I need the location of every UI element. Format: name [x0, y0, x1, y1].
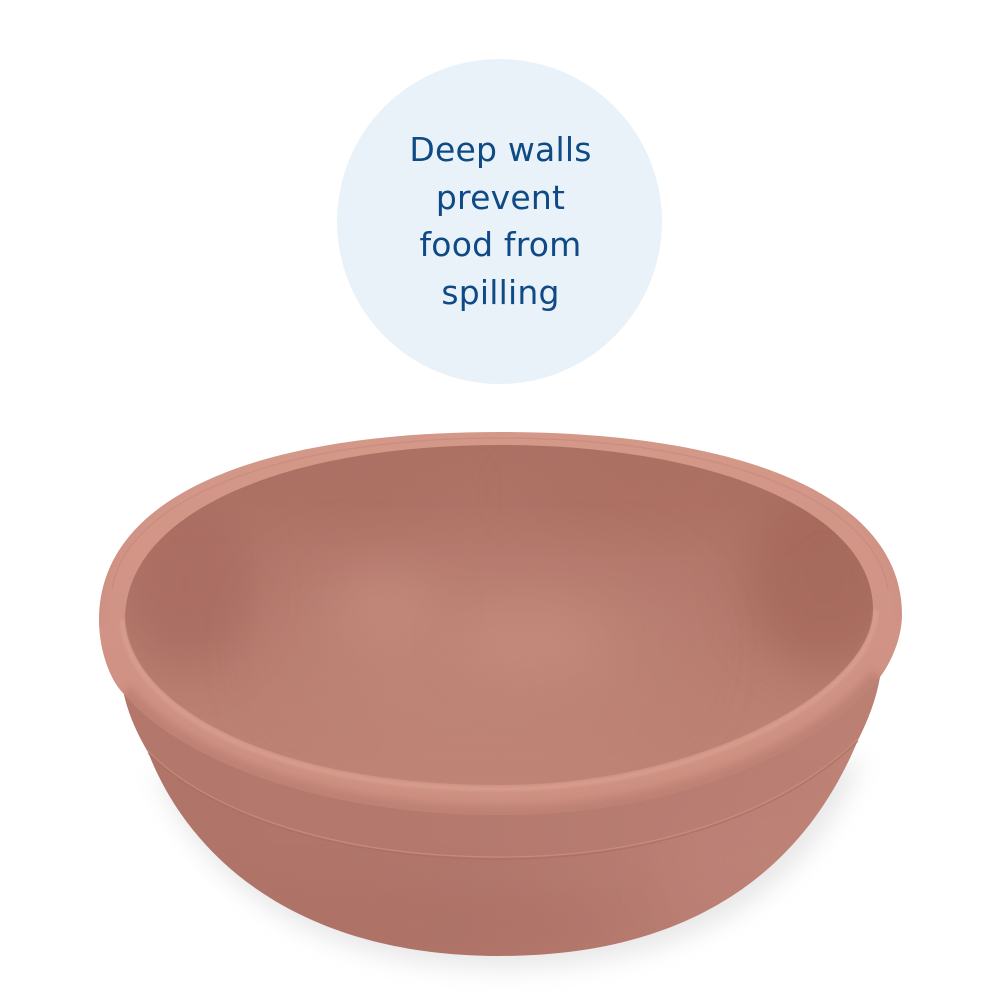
- callout text: prevent: [436, 178, 565, 216]
- interior shading: [130, 495, 873, 682]
- callout text: [409, 130, 592, 312]
- bowl interior: [120, 445, 905, 791]
- callout text: Deep walls: [409, 130, 592, 169]
- rim highlight: [122, 610, 876, 789]
- rim lower shading: [99, 480, 902, 815]
- rim inner step line: [112, 438, 888, 590]
- callout text: food from: [419, 225, 582, 264]
- bowl rim: [99, 432, 902, 815]
- illustration: bowl: [99, 432, 902, 972]
- body shading: [265, 828, 806, 956]
- upper body band: [123, 677, 880, 858]
- bowl outer body: [123, 677, 880, 965]
- bowl shadow: [155, 760, 862, 968]
- callout circle: [337, 59, 662, 384]
- callout text: spilling: [441, 272, 560, 312]
- bowl lower ridge: [148, 739, 858, 859]
